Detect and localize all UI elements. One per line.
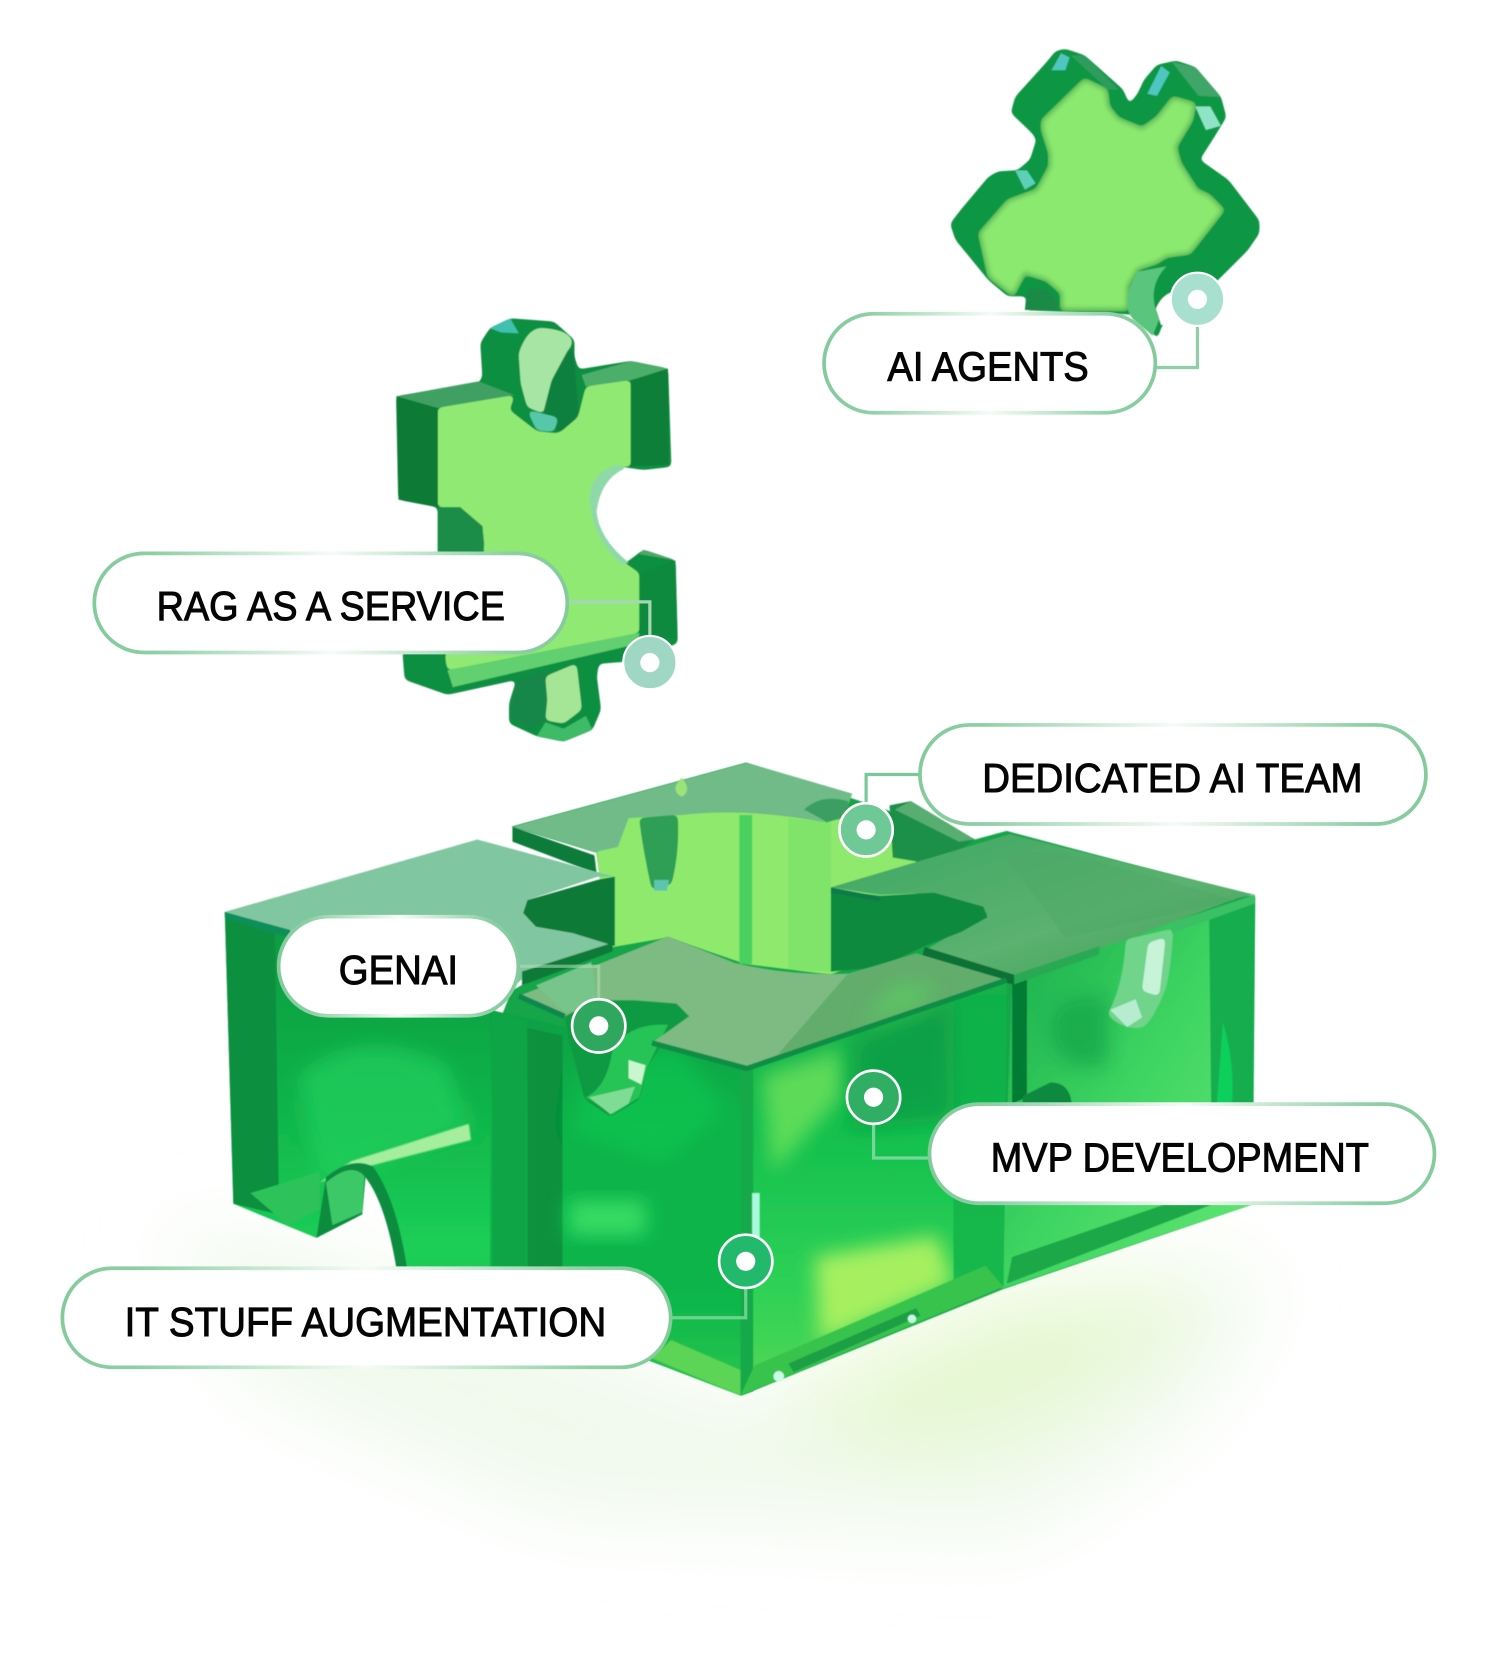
pin: Dedicated AI Team (839, 803, 893, 856)
pill: GenAI: GENAI (339, 947, 458, 993)
base backing (405, 763, 1255, 1396)
pin: IT Stuff Augmentation (719, 1235, 772, 1288)
puzzle piece: RAG as a Service (396, 319, 678, 741)
pill: AI Agents (824, 314, 1155, 413)
pin: RAG as a Service (623, 636, 676, 689)
pin: GenAI (572, 999, 625, 1053)
pill: MVP Development: MVP DEVELOPMENT (991, 1134, 1369, 1180)
pill: RAG as a Service (94, 553, 567, 652)
pill: RAG as a Service: RAG AS A SERVICE (157, 583, 505, 629)
pill: MVP Development (930, 1104, 1434, 1203)
pill: Dedicated AI Team: DEDICATED AI TEAM (982, 755, 1363, 801)
pill: IT Stuff Augmentation (62, 1268, 671, 1367)
pill: GenAI (279, 917, 518, 1016)
callout connectors (518, 325, 1197, 1318)
puzzle piece: front block (490, 936, 1007, 1396)
ground shadow (160, 1225, 1278, 1534)
pill: Dedicated AI Team (920, 725, 1426, 824)
pill: IT Stuff Augmentation: IT STUFF AUGMENTATION (125, 1299, 606, 1345)
pin: MVP Development (847, 1071, 900, 1124)
puzzle piece: back block (512, 763, 975, 975)
puzzle piece: left block (225, 839, 661, 1364)
pill: AI Agents: AI AGENTS (887, 343, 1089, 389)
puzzle piece: AI Agents (950, 49, 1259, 340)
pin: AI Agents (1171, 273, 1224, 326)
puzzle piece: right block (831, 834, 1255, 1289)
